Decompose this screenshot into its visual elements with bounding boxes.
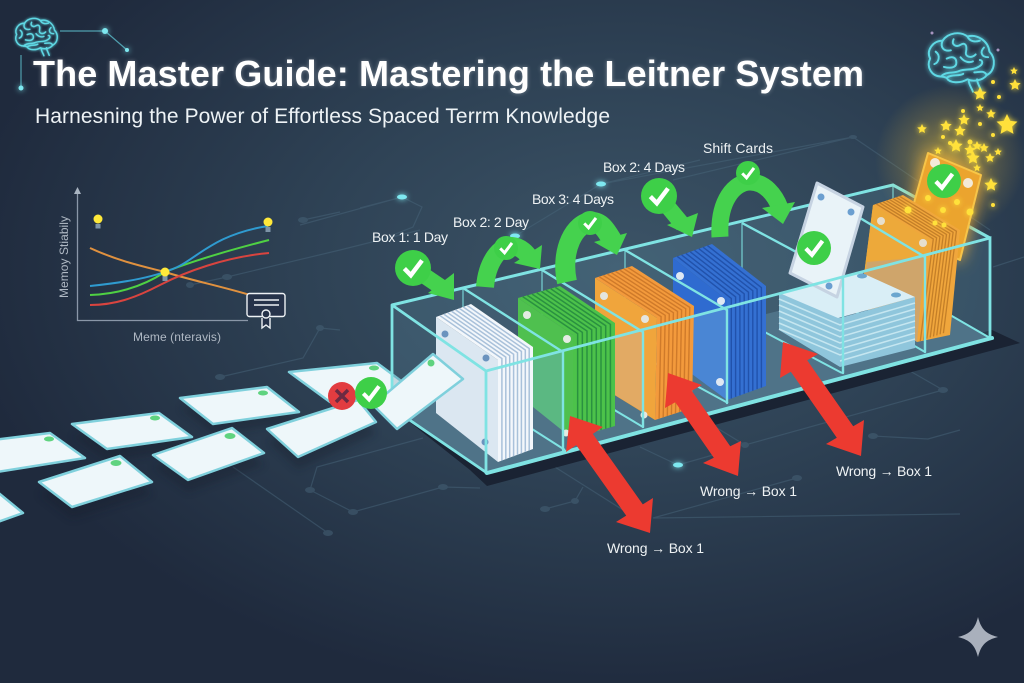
- trail card: [0, 433, 85, 472]
- trail card: [39, 456, 152, 507]
- trail card: [180, 387, 299, 424]
- red arrow: box 2 wrong: [566, 416, 653, 533]
- label: wrong 2: Wrong → Box 1: [700, 483, 797, 499]
- deck: box 4 blue: [673, 244, 766, 400]
- label: box 1: Box 1: 1 Day: [372, 229, 448, 245]
- trail card: [153, 428, 264, 480]
- tilted card check: [797, 231, 831, 265]
- label: box 2: Box 2: 2 Day: [453, 214, 529, 230]
- card shadows: [39, 397, 376, 519]
- icon: top-left brain with circuit: [16, 18, 129, 91]
- circuit network background: [186, 135, 1024, 536]
- back rim: [392, 185, 990, 305]
- red arrow: box 3 wrong: [665, 373, 741, 476]
- deck: box 1 white: [436, 304, 533, 462]
- label: wrong 3: Wrong → Box 1: [836, 463, 932, 479]
- deck: box 3 orange: [595, 266, 694, 420]
- glass box: front rim and dividers: [392, 238, 992, 473]
- icon: green check on card: [355, 377, 387, 409]
- label: wrong 1: Wrong → Box 1: [607, 540, 704, 556]
- red arrow: box 4 wrong: [780, 342, 864, 456]
- gold card check: [927, 164, 961, 198]
- entering card: [373, 354, 463, 429]
- line chart: memory stability: [57, 187, 285, 344]
- glass box: floor and back: [392, 185, 992, 473]
- raised golden card with sparkle: [905, 153, 981, 260]
- curve: orange: [90, 248, 250, 295]
- x axis label: Meme (nteravis): [133, 330, 221, 344]
- rear dividers behind tilted card: [742, 197, 925, 277]
- gold stars sparkle: [904, 67, 1021, 228]
- title: The Master Guide: Mastering the Leitner System: [33, 53, 864, 94]
- icon: certificate: [247, 294, 285, 328]
- trail card: [0, 490, 23, 523]
- box shadow: [392, 330, 1020, 486]
- green arrow: shift cards: [720, 161, 795, 237]
- tilted white card: [790, 183, 863, 297]
- label: box 2 four days: Box 2: 4 Days: [603, 159, 685, 175]
- green arrow: box 4: [641, 178, 698, 237]
- chart axes: [78, 192, 248, 320]
- trail card: [72, 413, 192, 449]
- glowing circuit nodes: [397, 182, 683, 468]
- icon: corner sparkle: [958, 617, 998, 657]
- subtitle: Harnesning the Power of Effortless Spaced Terrm Knowledge: [35, 105, 610, 128]
- bulbs: [94, 214, 272, 281]
- icon: red wrong mark: [328, 382, 356, 410]
- curve: green: [90, 240, 269, 295]
- green arrow: box 2: [485, 236, 542, 287]
- trail card: [289, 363, 420, 402]
- icon: top-right brain: [929, 32, 1000, 92]
- deck: box 2 green: [518, 286, 615, 438]
- card badges: [44, 366, 379, 466]
- curve: red: [90, 253, 269, 305]
- label: shift cards: Shift Cards: [703, 140, 773, 156]
- deck: flat light blue stack: [779, 272, 915, 367]
- label: box 3: Box 3: 4 Days: [532, 191, 614, 207]
- floor cards trail: [0, 363, 420, 523]
- trail card: [267, 400, 376, 457]
- curve: blue: [90, 226, 268, 286]
- golden halo: [875, 85, 1024, 235]
- y axis label: Memoy Stiabily: [57, 216, 71, 298]
- green arrow: box 1: [395, 250, 454, 300]
- deck: box 5 orange: [860, 195, 960, 342]
- floor divider lines: [463, 282, 990, 450]
- green arrow: box 3: [565, 211, 627, 282]
